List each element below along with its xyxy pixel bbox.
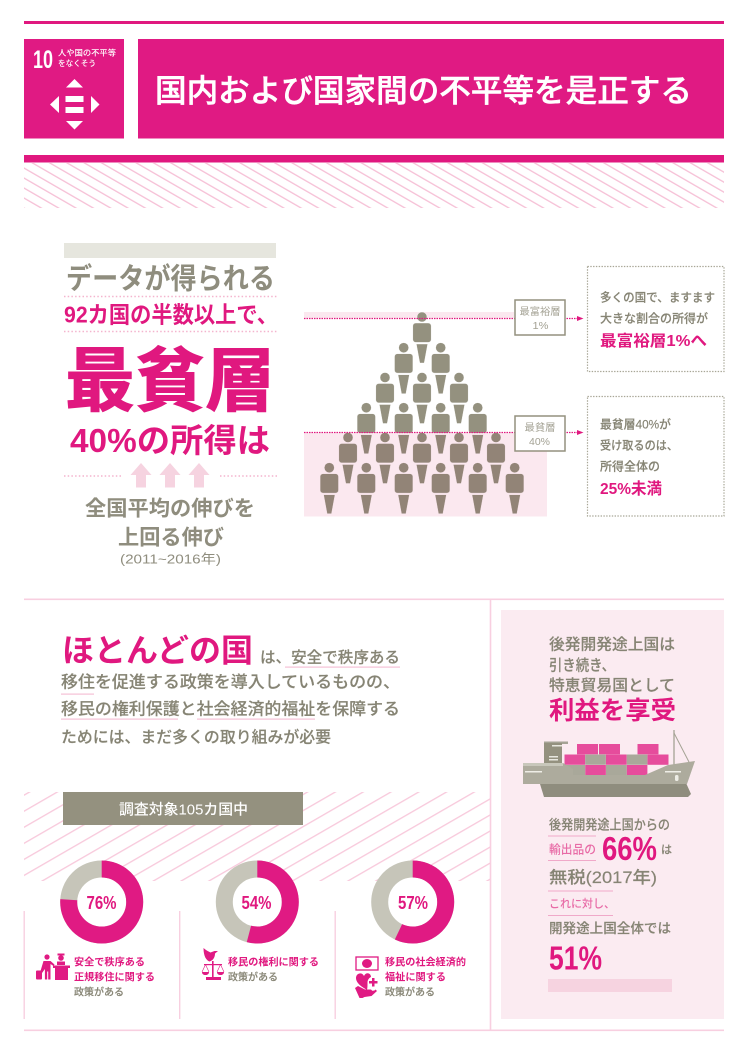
text: LDC preferential trade: 後発開発途上国は bbox=[549, 636, 675, 654]
SDG 10 logo panel bbox=[24, 39, 124, 138]
big heading: poorest: 最貧層 bbox=[65, 342, 275, 420]
donut chart: 54 percent bbox=[216, 860, 299, 944]
text: period: (2011~2016年) bbox=[120, 552, 221, 566]
icon: container ship bbox=[523, 730, 695, 797]
callout: richest share bbox=[588, 266, 724, 372]
text: in contrast bbox=[548, 890, 671, 936]
title banner bbox=[138, 39, 724, 138]
text: socioeconomic wellbeing: 政策がある bbox=[385, 986, 435, 998]
donut chart: 54 percent: 54% bbox=[242, 893, 272, 913]
text block: migration policy: ためには、まだ多くの取り組みが必要 bbox=[61, 728, 331, 746]
label: richest 1 percent: 最富裕層 bbox=[520, 305, 560, 318]
callout: richest share: 多くの国で、ますます bbox=[600, 290, 715, 304]
donut chart: 57 percent: 57% bbox=[398, 893, 428, 913]
goal name bbox=[58, 48, 116, 68]
panel: headline statistic bbox=[64, 243, 278, 566]
text: duty free 66 percent: 無税(2017年) bbox=[549, 868, 657, 887]
text: socioeconomic wellbeing: 福祉に関する bbox=[385, 970, 446, 984]
donut chart: 76 percent bbox=[60, 860, 143, 944]
panel: least developed countries trade: 引き続き、 bbox=[549, 656, 615, 674]
text: socioeconomic wellbeing: 移民の社会経済的 bbox=[385, 956, 466, 968]
text: orderly migration: 正規移住に関する bbox=[74, 970, 155, 984]
title: 国内および国家間の不平等を是正する bbox=[155, 72, 692, 108]
label: richest 1 percent: 1% bbox=[532, 320, 548, 332]
label: poorest 40 percent: 40% bbox=[529, 436, 550, 448]
goal name: をなくそう bbox=[58, 58, 96, 68]
text: duty free 66 percent bbox=[548, 818, 672, 887]
icon: banknote, heart and hand bbox=[355, 957, 378, 998]
text: migrant rights: 政策がある bbox=[228, 970, 278, 984]
label: poorest 40 percent bbox=[515, 416, 565, 451]
heading: 92 countries: 92カ国の半数以上で、 bbox=[64, 302, 278, 328]
text: orderly migration bbox=[74, 956, 155, 998]
icon: dove and scales bbox=[202, 948, 224, 980]
label: richest 1 percent bbox=[515, 300, 565, 335]
chart: income pyramid of people bbox=[304, 300, 584, 516]
heading: data available: データが得られる bbox=[66, 262, 275, 296]
text block: migration policy bbox=[61, 632, 400, 746]
callout: richest share: 大きな割合の所得が bbox=[600, 312, 708, 326]
text: duty free 66 percent: は bbox=[661, 844, 672, 856]
text: orderly migration: 安全で秩序ある bbox=[74, 956, 145, 968]
callout: poorest share: 所得全体の bbox=[600, 460, 660, 474]
goal number: 10 bbox=[33, 46, 53, 74]
text: orderly migration: 政策がある bbox=[74, 986, 124, 998]
text: in contrast: 開発途上国全体では bbox=[549, 921, 671, 936]
text block: migration policy: は、安全で秩序ある bbox=[260, 648, 400, 666]
donut chart: 76 percent: 76% bbox=[86, 893, 116, 913]
goal name: 人や国の不平等 bbox=[58, 48, 116, 58]
people icons bbox=[320, 312, 524, 514]
icon: traveller at immigration desk bbox=[36, 954, 70, 980]
text: above national average: 全国平均の伸びを bbox=[85, 498, 255, 520]
text: migrant rights bbox=[228, 956, 319, 984]
arrow: richest bbox=[577, 316, 584, 321]
label: poorest 40 percent: 最貧層 bbox=[524, 421, 556, 434]
icon: three up arrows bbox=[130, 463, 210, 488]
text: in contrast: これに対し、 bbox=[549, 896, 615, 910]
survey banner bbox=[63, 792, 303, 825]
heading: most countries: ほとんどの国 bbox=[62, 632, 253, 668]
survey banner: 調査対象105カ国中 bbox=[119, 800, 248, 818]
text: duty free 66 percent: 輸出品の bbox=[549, 842, 596, 856]
panel: least developed countries trade: 特恵貿易国として bbox=[549, 676, 675, 694]
text: socioeconomic wellbeing bbox=[385, 956, 466, 998]
callout: poorest share: 25%未満 bbox=[600, 480, 662, 498]
panel: headline statistic: 上回る伸び bbox=[118, 526, 224, 550]
callout: richest share: 最富裕層1%へ bbox=[600, 332, 707, 350]
donut chart: 57 percent bbox=[371, 860, 454, 944]
text block: migration policy: 移住を促進する政策を導入しているものの、 bbox=[61, 674, 400, 692]
heading: benefit: 利益を享受 bbox=[549, 697, 676, 725]
text block: migration policy: 移民の権利保護と社会経済的福祉を保障する bbox=[61, 700, 400, 718]
arrow: poorest bbox=[577, 430, 584, 435]
callout: poorest share: 受け取るのは、 bbox=[600, 438, 678, 452]
callout: poorest share: 最貧層40%が bbox=[600, 418, 671, 432]
text: migrant rights: 移民の権利に関する bbox=[228, 956, 319, 968]
heading: 40 percent income: 40%の所得は bbox=[70, 422, 270, 459]
icon: reduced inequality symbol bbox=[50, 79, 100, 130]
text: duty free 66 percent: 後発開発途上国からの bbox=[549, 818, 670, 832]
panel: least developed countries trade bbox=[501, 610, 724, 1019]
text: duty free 66 percent: 66% bbox=[602, 830, 657, 867]
statistic: 51 percent: 51% bbox=[549, 940, 602, 976]
callout: poorest share bbox=[588, 396, 724, 516]
